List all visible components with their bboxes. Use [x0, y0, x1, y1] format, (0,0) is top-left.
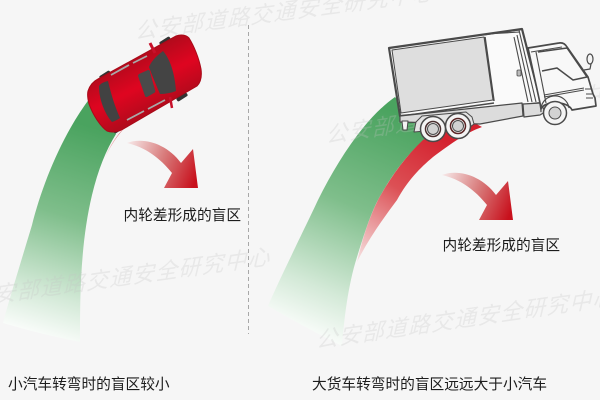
caption: truck: 大货车转弯时的盲区远远大于小汽车: [312, 376, 547, 393]
label: car blind zone: 内轮差形成的盲区: [124, 207, 241, 224]
icon: truck: [389, 29, 596, 142]
red blind zone: truck: [357, 118, 482, 262]
divider: [248, 25, 250, 334]
arrow: truck blind zone: [442, 173, 513, 220]
caption: car: 小汽车转弯时的盲区较小: [8, 375, 170, 393]
label: truck blind zone: 内轮差形成的盲区: [442, 237, 560, 254]
green wheel path: truck: [268, 97, 426, 346]
icon: red car: [88, 35, 201, 134]
arrow: car blind zone: [127, 141, 198, 188]
red blind zone sliver: car: [105, 126, 126, 158]
green wheel path: car: [3, 98, 116, 342]
